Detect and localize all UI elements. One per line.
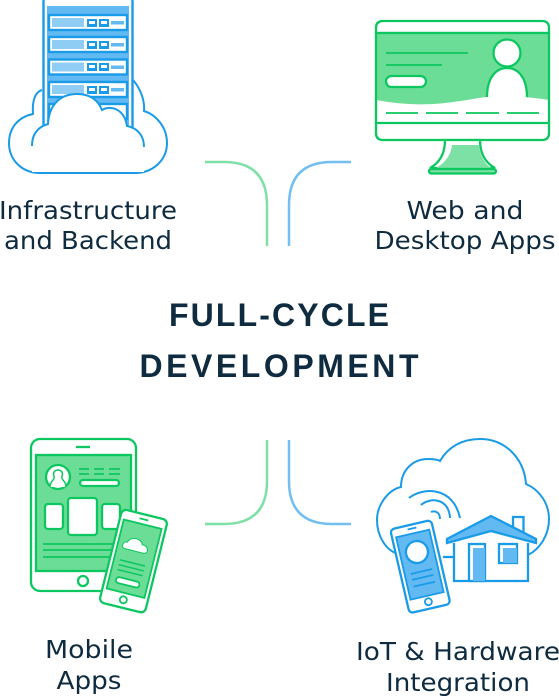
title: Full-Cycle Development: DEVELOPMENT [140, 348, 419, 384]
label: Mobile Apps: Apps [56, 666, 122, 695]
title: Full-Cycle Development: FULL-CYCLE [169, 297, 389, 333]
label: IoT & Hardware Integration: Integration [386, 668, 530, 697]
icon: cloud, smart home and phone [377, 439, 549, 613]
label: Web and Desktop Apps: Desktop Apps [374, 226, 556, 255]
connector: top right curve [289, 162, 351, 246]
label: Infrastructure and Backend: and Backend [4, 226, 172, 255]
icon: server rack and cloud [9, 0, 167, 173]
connector: bottom right curve [289, 440, 351, 524]
label: Infrastructure and Backend: Infrastructure [0, 196, 177, 225]
label: Mobile Apps: Mobile [45, 635, 133, 664]
label: IoT & Hardware Integration: IoT & Hardware [356, 637, 559, 666]
label: Web and Desktop Apps: Web and [406, 196, 524, 225]
connector: top left curve [205, 162, 267, 246]
icon: tablet and phone [31, 439, 168, 613]
connector: bottom left curve [205, 440, 267, 524]
icon: desktop monitor [376, 21, 549, 174]
